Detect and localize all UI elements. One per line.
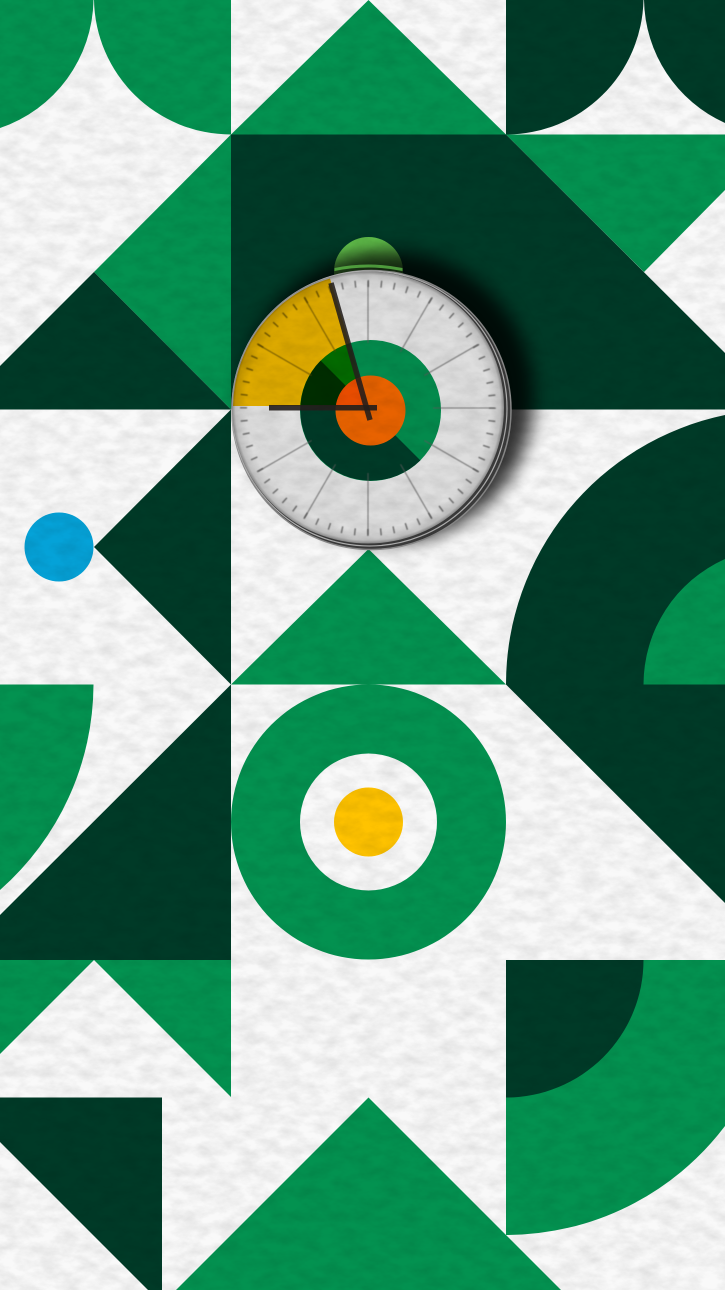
green ring disc bbox=[300, 340, 441, 481]
right green trapezoid bbox=[506, 134, 725, 272]
dark triangle bbox=[94, 410, 231, 684]
dark half of ring bbox=[300, 361, 420, 481]
small tick marks bbox=[244, 284, 492, 532]
hour hand bbox=[269, 405, 377, 410]
large dark polygon bbox=[231, 134, 725, 410]
top dark quarter circle bbox=[506, 0, 644, 135]
target circle bbox=[231, 684, 506, 960]
row 5 shapes bbox=[0, 960, 725, 1290]
icon: blue dot bbox=[24, 512, 94, 582]
minute hand bbox=[331, 283, 370, 420]
row 2 shapes bbox=[0, 134, 725, 410]
bottom right dark quarter circle bbox=[506, 960, 644, 1098]
green triangle bbox=[94, 960, 231, 1097]
clock bbox=[232, 237, 534, 550]
left dark polygon bbox=[0, 684, 231, 960]
bottom green triangle bbox=[176, 1098, 561, 1290]
row 1 shapes bbox=[0, 0, 725, 272]
top green quarter circle bbox=[94, 0, 231, 134]
clock drop shadow bbox=[242, 251, 534, 543]
left green triangle bbox=[94, 134, 231, 410]
right inner green quarter circle bbox=[644, 559, 725, 684]
orange centre bbox=[336, 376, 406, 446]
light green crown dot bbox=[334, 237, 403, 306]
crown highlight band bbox=[334, 264, 402, 271]
top right dark arc bbox=[644, 0, 725, 123]
hour lines bbox=[258, 281, 495, 535]
yellow sector bbox=[233, 278, 368, 406]
row 3 shapes bbox=[24, 410, 725, 684]
top left green arc bbox=[0, 0, 94, 128]
inner glass edge bbox=[232, 271, 507, 546]
small green triangle bbox=[0, 960, 94, 1054]
green triangle under clock bbox=[231, 549, 506, 684]
yellow centre bbox=[334, 788, 403, 856]
bottom right green quarter circle bbox=[506, 960, 725, 1235]
top green triangle bbox=[231, 0, 506, 134]
clock dial bbox=[232, 272, 504, 544]
row 4 shapes bbox=[0, 684, 725, 960]
left green arc bbox=[0, 684, 94, 890]
right dark quarter circle bbox=[506, 415, 725, 684]
green ring bbox=[231, 684, 506, 960]
right dark triangle bbox=[506, 684, 725, 903]
left dark triangle bbox=[0, 272, 231, 410]
bottom left dark shape bbox=[0, 1098, 162, 1290]
outer glass rim bbox=[232, 270, 511, 550]
